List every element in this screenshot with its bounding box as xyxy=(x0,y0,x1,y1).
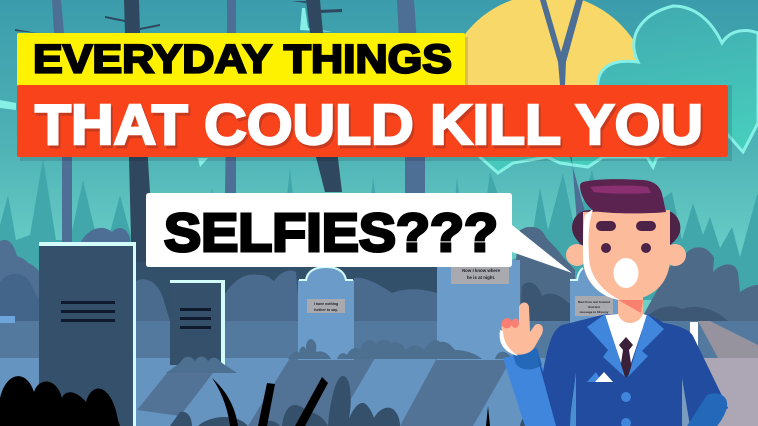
raised forearm sleeve xyxy=(503,350,557,426)
foreground black bushes xyxy=(0,376,120,426)
path grey far xyxy=(698,321,758,358)
small left marker xyxy=(0,316,15,323)
tree trunk 1 xyxy=(52,0,72,250)
tree trunk 3 xyxy=(225,0,236,193)
hair sides xyxy=(572,210,680,245)
foreground dark bushes xyxy=(170,376,552,426)
grave bushes xyxy=(288,339,482,359)
man xyxy=(500,179,728,426)
gravestone: now I know where xyxy=(437,260,520,360)
red banner xyxy=(17,85,728,157)
hair highlight xyxy=(590,186,651,194)
bubble text: SELFIES??? xyxy=(164,203,498,263)
left bushes xyxy=(0,240,40,321)
eyes xyxy=(601,243,611,253)
bushes between stones xyxy=(512,227,575,321)
buttons xyxy=(621,392,631,402)
path lavender near xyxy=(700,358,758,426)
small cloud fragments xyxy=(0,8,333,167)
gravestone: text message: Died from text forward xyxy=(578,300,610,304)
gravestone: text message xyxy=(570,267,620,360)
back bushes dark xyxy=(136,262,520,321)
yellow banner xyxy=(17,33,465,86)
banner shadow xyxy=(20,37,732,161)
tie xyxy=(619,337,633,378)
jacket xyxy=(543,314,728,426)
sun xyxy=(464,0,636,85)
mouth xyxy=(614,258,638,288)
neck xyxy=(618,294,643,330)
ground near xyxy=(0,358,758,426)
right bushes lower xyxy=(645,306,728,321)
gravestone: nothing further: I have nothing xyxy=(314,302,338,306)
red banner text: THAT COULD KILL YOU xyxy=(35,93,703,157)
black grass blades xyxy=(212,377,490,426)
neck shadow xyxy=(618,300,643,313)
face highlight xyxy=(583,209,620,300)
lapels xyxy=(587,314,664,377)
arm dark xyxy=(537,326,575,426)
hand xyxy=(501,302,543,355)
left jacket inner shade xyxy=(569,372,576,426)
bump behind large stone xyxy=(80,228,130,250)
red banner text shadow: THAT COULD KILL YOU xyxy=(37,96,705,160)
ears xyxy=(566,244,588,266)
tree trunk 6 xyxy=(540,0,596,260)
left bushes front xyxy=(0,274,40,321)
gravestone: text message: that last xyxy=(588,305,600,309)
title banner xyxy=(17,33,732,161)
gravestone: now I know where: he is at night. xyxy=(467,275,495,280)
hair top xyxy=(580,179,666,213)
ground far band xyxy=(0,321,758,359)
right jacket inner shade xyxy=(682,378,690,426)
ground shadows xyxy=(137,358,512,426)
tree branches 2 xyxy=(15,16,160,33)
gravestone: large xyxy=(39,242,136,426)
lower sleeve xyxy=(687,393,727,426)
eyebrows xyxy=(596,221,616,231)
grave bushes right xyxy=(495,352,516,359)
fingernails xyxy=(501,318,519,328)
white backing xyxy=(690,322,698,416)
yellow banner text: EVERYDAY THINGS xyxy=(33,38,452,82)
bushes between stones dark xyxy=(520,282,572,321)
gravestone: nothing further: further to say. xyxy=(314,308,338,312)
gravestone: nothing further xyxy=(298,266,354,360)
mid bushes xyxy=(136,270,437,321)
cuff shade xyxy=(512,348,542,369)
forest spikes xyxy=(0,158,758,300)
tree trunk 4 xyxy=(292,0,342,192)
hand highlight xyxy=(500,330,518,356)
cloud right xyxy=(470,6,758,173)
gravestone: now I know where: Now I know where xyxy=(462,268,501,273)
tree trunk 5 xyxy=(397,0,425,196)
right bushes xyxy=(640,247,758,321)
shirt xyxy=(605,314,647,378)
gravestone: small xyxy=(166,280,237,373)
gravestone: text message: message to fill pony xyxy=(580,310,609,314)
face xyxy=(583,210,670,300)
pocket square xyxy=(587,372,602,382)
tree trunk 2 xyxy=(124,0,150,280)
speech bubble xyxy=(146,193,572,273)
